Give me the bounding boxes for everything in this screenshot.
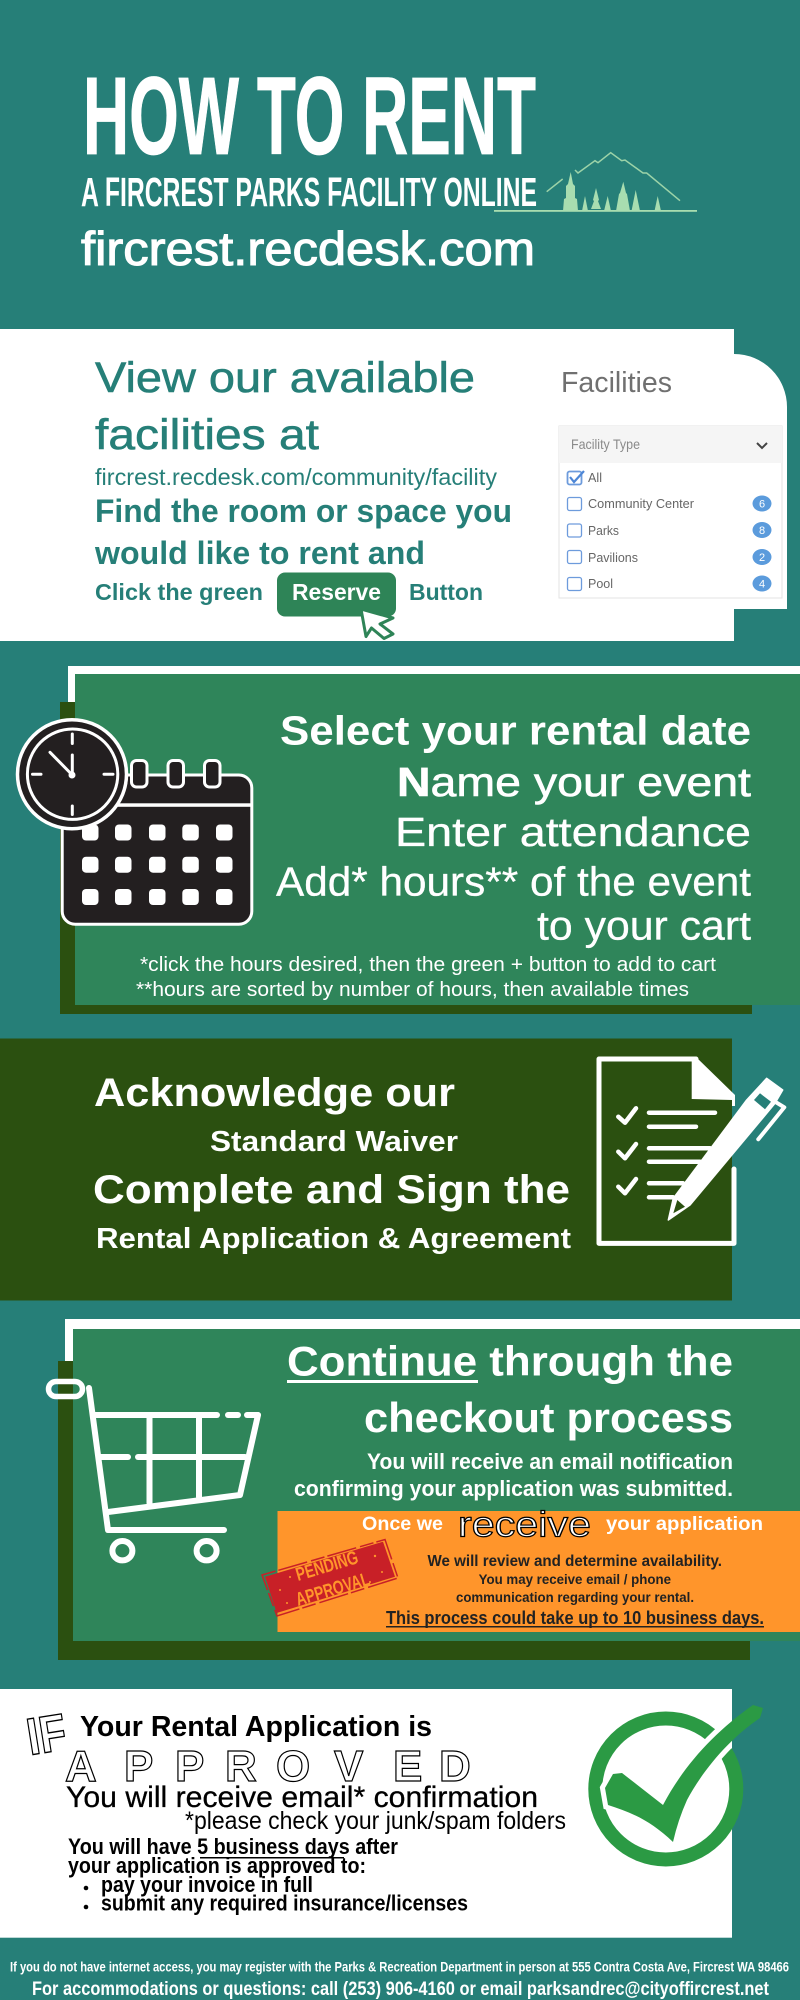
note: junk folders: *please check your junk/spam folders	[185, 1807, 566, 1835]
facilities filter widget: 2	[759, 552, 765, 564]
icon: shopping cart	[48, 1382, 258, 1560]
text: standard waiver: Standard Waiver	[210, 1126, 458, 1158]
panel: checkout	[48, 1319, 800, 1660]
text: confirming application: confirming your application was submitted.	[294, 1476, 733, 1501]
stamp: pending approval: PENDING	[293, 1547, 361, 1586]
text: add hours: Add* hours** of the event	[276, 858, 752, 904]
text: if outline: IF	[23, 1703, 70, 1767]
text: email notification: You will receive an email notification	[367, 1449, 733, 1474]
icon: clock	[18, 720, 126, 829]
callout: review notice: This process could take up to 10 business days.	[386, 1608, 764, 1628]
panel: waiver and agreement	[0, 1038, 784, 1300]
text: name your event: Name your event	[397, 759, 752, 805]
website address: fircrest.recdesk.com	[81, 222, 535, 275]
icon: green check mark	[595, 1705, 763, 1860]
facilities filter widget: Facility Type	[571, 436, 640, 452]
text: button: Button	[409, 579, 483, 605]
text: select your rental date: Select your rental date	[280, 708, 751, 754]
text: rental application: Rental Application & Agreement	[96, 1223, 571, 1255]
callout: review notice	[262, 1504, 800, 1632]
heading: facilities at: facilities at	[95, 411, 319, 459]
list: required actions: submit any required insurance/licenses	[101, 1891, 468, 1916]
link: facility page: fircrest.recdesk.com/community/facility	[95, 464, 498, 490]
note: hours sorted: **hours are sorted by number of hours, then available times	[136, 979, 689, 1001]
button: reserve	[277, 572, 396, 616]
heading: approved outline: APPROVED	[65, 1742, 471, 1791]
facilities filter widget: Pavilions	[588, 550, 638, 565]
facilities filter widget: Pool	[588, 576, 613, 591]
facilities filter widget	[559, 367, 782, 598]
list: required actions: pay your invoice in full	[101, 1872, 313, 1897]
callout: review notice: We will review and determine availability.	[428, 1553, 722, 1570]
callout: review notice: your application	[606, 1514, 763, 1535]
facilities filter widget: Parks	[588, 523, 619, 538]
heading: view facilities: View our available	[95, 354, 475, 402]
panel: view facilities	[0, 329, 787, 641]
header	[81, 55, 697, 275]
text: checkout process: checkout process	[364, 1394, 733, 1441]
callout: review notice: You may receive email / phone	[479, 1571, 671, 1587]
callout: review notice: receive	[458, 1504, 591, 1545]
text: enter attendance: Enter attendance	[395, 809, 751, 855]
stamp: pending approval: APPROVAL	[293, 1569, 373, 1611]
button: reserve: Reserve	[292, 579, 381, 605]
facilities filter widget: 6	[759, 498, 765, 510]
facilities filter widget: Facilities	[561, 367, 672, 399]
text: application approved: your application is approved to:	[68, 1853, 366, 1878]
icon: cursor	[361, 609, 393, 638]
text: continue through: Continue through the	[287, 1338, 733, 1385]
stamp: pending approval	[262, 1540, 398, 1616]
panel: approved	[0, 1689, 763, 1938]
text: acknowledge our: Acknowledge our	[94, 1071, 455, 1115]
heading: your rental application: Your Rental Application is	[80, 1711, 432, 1743]
text: complete and sign: Complete and Sign the	[93, 1168, 570, 1212]
icon: calendar	[62, 760, 253, 924]
icon: mountain and trees logo	[494, 153, 697, 212]
list: required actions	[84, 1872, 468, 1916]
text: email confirmation: You will receive email* confirmation	[66, 1781, 538, 1814]
facilities filter widget: 4	[759, 578, 765, 590]
facilities filter widget: Community Center	[588, 496, 695, 511]
note: click the hours: *click the hours desired, then the green + button to add to cart	[140, 954, 716, 976]
text: click the green: Click the green	[95, 579, 263, 605]
text: to your cart: to your cart	[537, 903, 752, 949]
callout: review notice: communication regarding your rental.	[456, 1589, 694, 1605]
panel: select rental date	[18, 666, 800, 1014]
callout: review notice: Once we	[362, 1514, 443, 1535]
facilities filter widget: All	[588, 470, 602, 485]
facilities filter widget: 8	[759, 525, 765, 537]
text: would like to rent: would like to rent and	[94, 535, 425, 571]
footer	[10, 1959, 789, 2000]
icon: checklist and pen	[599, 1057, 784, 1243]
text: five business days: You will have 5 business days after	[68, 1834, 398, 1859]
text: find the room: Find the room or space you	[95, 493, 512, 529]
